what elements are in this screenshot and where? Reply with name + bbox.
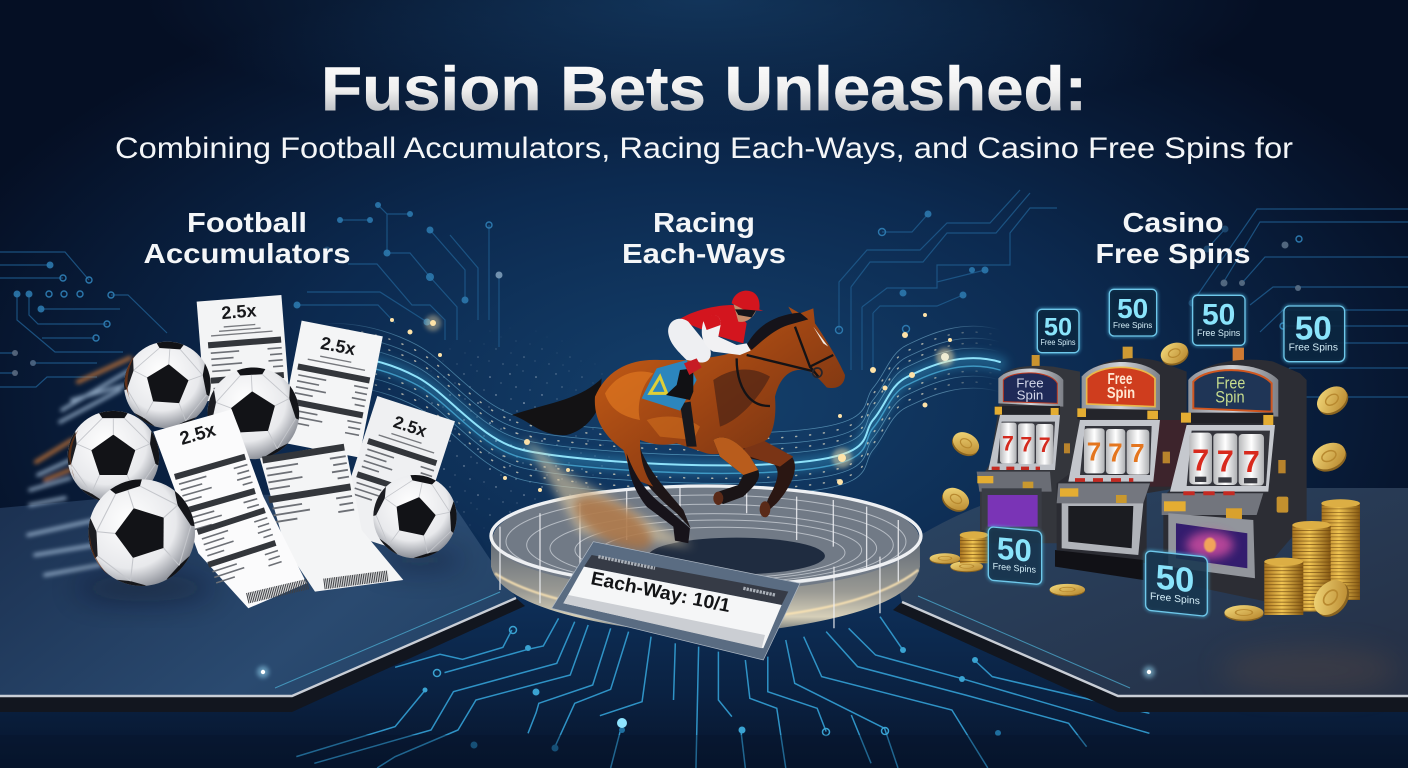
circuit nodes right [900,210,1301,400]
right platform edge [893,596,1408,712]
badge: 50 free spins 5 [988,527,1042,585]
badge: 50 free spins 5: 50 [997,531,1032,569]
badge: 50 free spins 1: 50 [1044,313,1072,341]
slot machine right: Free [1216,373,1245,392]
central floor [0,590,1408,768]
slot machine middle: Spin [1107,385,1135,402]
slot machine right: 7 [1243,445,1260,479]
track centre [648,538,825,574]
horse body [595,307,845,487]
badge: 50 free spins 3: 50 [1202,299,1235,332]
circuit pattern left [0,205,499,387]
heading: football accumulators: Accumulators [144,238,350,269]
badge: 50 free spins 6: 50 [1156,558,1194,600]
far hind leg [630,437,691,528]
slot machine left: Free [1016,375,1044,390]
saddle cloth [642,360,697,411]
floor circuit traces [296,617,1149,768]
each-way ticket [552,542,800,660]
ball: top left [114,335,221,439]
right platform [890,488,1408,696]
heading: casino free spins [1096,207,1250,269]
slot machine left: 7 [1020,432,1032,456]
heading: football accumulators: Football [187,207,307,238]
face blaze [813,327,828,347]
track deck [493,485,919,592]
receipt back right [260,443,403,592]
badge: 50 free spins 6: Free Spins [1150,591,1200,607]
heading: football accumulators [144,207,350,269]
slot machine left [977,355,1080,543]
ball: bottom left [65,459,220,611]
receipt front [153,409,307,608]
badge: 50 free spins 5: Free Spins [993,561,1036,575]
receipt top right: 2.5x [319,333,357,359]
floor circuit rings [434,626,888,736]
heading: casino free spins: Casino [1122,207,1224,238]
slot machine middle: 7 [1087,437,1101,467]
slot machine middle: 7 [1108,437,1123,467]
circuit pattern right [839,190,1408,397]
left platform [0,492,516,696]
ball shadows [75,550,465,602]
floor circuit nodes [422,645,1001,752]
receipt right [334,396,455,554]
slot machine right: Spin [1215,388,1245,407]
far hoof [760,501,770,517]
ball: middle left [60,407,166,510]
subtitle: Combining Football Accumulators, Racing Each-Ways, and Casino Free Spins for [115,132,1293,165]
receipt right: 2.5x [391,412,430,441]
badge: 50 free spins 1 [1037,309,1079,353]
slot machine left: 7 [1002,432,1014,456]
jockey boot [666,368,693,400]
red sock [684,358,702,375]
badge: 50 free spins 4: Free Spins [1289,343,1338,354]
coins floating [948,428,983,461]
racetrack [491,485,921,637]
badge: 50 free spins 1: Free Spins [1040,338,1075,347]
badge: 50 free spins 4 [1284,306,1345,362]
slot machine right [1162,348,1307,602]
near front hoof [713,492,723,505]
slot machine left: Spin [1017,387,1043,402]
bridle [737,327,833,406]
ball: right [358,463,472,574]
heading: racing each-ways [622,207,786,269]
jockey arm [702,315,751,355]
particle field [404,330,617,528]
near front leg [713,437,759,504]
girth strap [680,402,697,447]
each-way ticket: Each-Way: 10/1 [589,568,732,617]
football speed streaks [28,358,130,575]
slot machine middle: 7 [1130,438,1145,468]
receipt back right rows [262,444,354,523]
receipt top centre [197,295,289,402]
heading: racing each-ways: Each-Ways [622,238,786,269]
slot machine right: 7 [1217,444,1234,478]
badge: 50 free spins 2: 50 [1117,293,1148,324]
circuit nodes left [12,202,502,376]
receipt top right [278,321,383,457]
badge: 50 free spins 6 [1146,551,1207,616]
slot machine middle [1055,347,1187,580]
circuit rings right [836,228,1303,346]
tail [512,378,602,435]
left platform edge [0,592,525,712]
jockey torso [678,305,747,343]
circuit rings left [46,222,492,341]
coin stacks [960,499,1360,615]
near hind leg [627,453,690,543]
dust cloud [523,437,693,547]
jockey face [733,303,757,322]
badge: 50 free spins 4: 50 [1295,310,1332,347]
top glow [144,0,1264,130]
horse muscles highlight [605,372,653,420]
far front leg [733,437,795,517]
track wall [491,537,920,637]
badge: 50 free spins 3 [1193,295,1245,345]
receipt front text: 2.5x [177,418,218,449]
platform lights [257,666,1155,678]
title: Fusion Bets Unleashed: [321,55,1087,124]
slot machine middle: Free [1107,371,1132,388]
right platform warm light [1220,646,1400,694]
badge: 50 free spins 2 [1109,289,1157,336]
receipt top centre: 2.5x [221,300,257,323]
jockey legs [668,319,711,363]
heading: casino free spins: Free Spins [1096,238,1250,269]
track wall glow [495,570,918,622]
badge: 50 free spins 3: Free Spins [1197,328,1241,338]
panel: casino slot machines [930,289,1360,623]
light wave connecting the panels [320,324,1000,495]
panel: racing horse and jockey [512,291,845,561]
badge: 50 free spins 2: Free Spins [1113,320,1153,330]
track rail [491,486,921,628]
panel: football accumulators [60,295,472,611]
floor bottom fade [0,735,1408,768]
horse mane [747,313,808,350]
receipt front rows [174,454,261,531]
slot machine left: 7 [1039,433,1051,457]
ball: top right [198,361,309,469]
slot machine right: 7 [1192,444,1209,478]
jockey helmet [732,291,763,311]
heading: racing each-ways: Racing [653,207,755,238]
barcodes [247,576,388,598]
glowing particles [352,313,954,492]
